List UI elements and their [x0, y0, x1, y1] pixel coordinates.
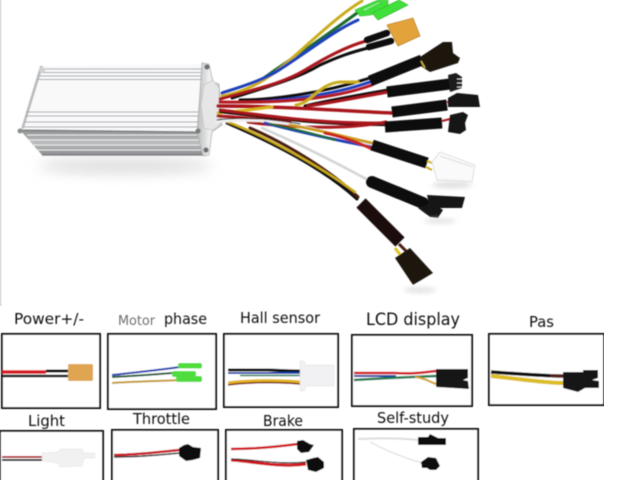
panel: Throttle — [112, 410, 218, 480]
connector: LCD plug — [370, 42, 460, 81]
heading: Light — [28, 412, 65, 430]
heading: Power+/- — [14, 310, 84, 328]
connector: motor phase terminals — [355, 0, 408, 20]
panel: Brake — [226, 412, 342, 480]
panel: Light — [0, 412, 103, 480]
connector: plug 3 — [392, 93, 480, 112]
connector: plug 2 — [387, 73, 462, 92]
connector: plug 4 — [385, 112, 468, 134]
connector: hall sensor white plug — [372, 145, 475, 188]
heading: LCD display — [366, 310, 460, 329]
motor phase wires — [222, 1, 362, 96]
power wires — [220, 41, 368, 99]
heading — [118, 310, 207, 329]
heading: Throttle — [132, 410, 190, 428]
heading: phase — [164, 310, 207, 328]
panel: Hall sensor — [224, 309, 338, 407]
heading: Motor — [118, 314, 156, 329]
end cap — [195, 63, 222, 156]
connector: power XT60 — [367, 18, 420, 47]
aluminium housing — [18, 64, 205, 155]
brake and PAS wires — [227, 122, 358, 199]
self-study wire — [262, 128, 368, 180]
panel: LCD display — [352, 310, 472, 406]
LCD wires — [220, 78, 372, 102]
heading: Self-study — [377, 409, 449, 427]
connector: PAS plug — [361, 203, 436, 293]
heading: Hall sensor — [240, 309, 321, 327]
hall wires — [217, 118, 372, 149]
panel: Power+/- — [2, 310, 100, 408]
panel: Pas — [489, 313, 604, 405]
panel: Self-study — [354, 409, 478, 480]
controller unit — [18, 63, 222, 173]
throttle and signal wires — [218, 82, 392, 127]
wire harness — [217, 1, 392, 199]
connector: self-study plug — [372, 182, 465, 224]
panel: Motor phase — [108, 310, 216, 409]
heading: Pas — [529, 313, 554, 331]
heading: Brake — [263, 412, 303, 430]
